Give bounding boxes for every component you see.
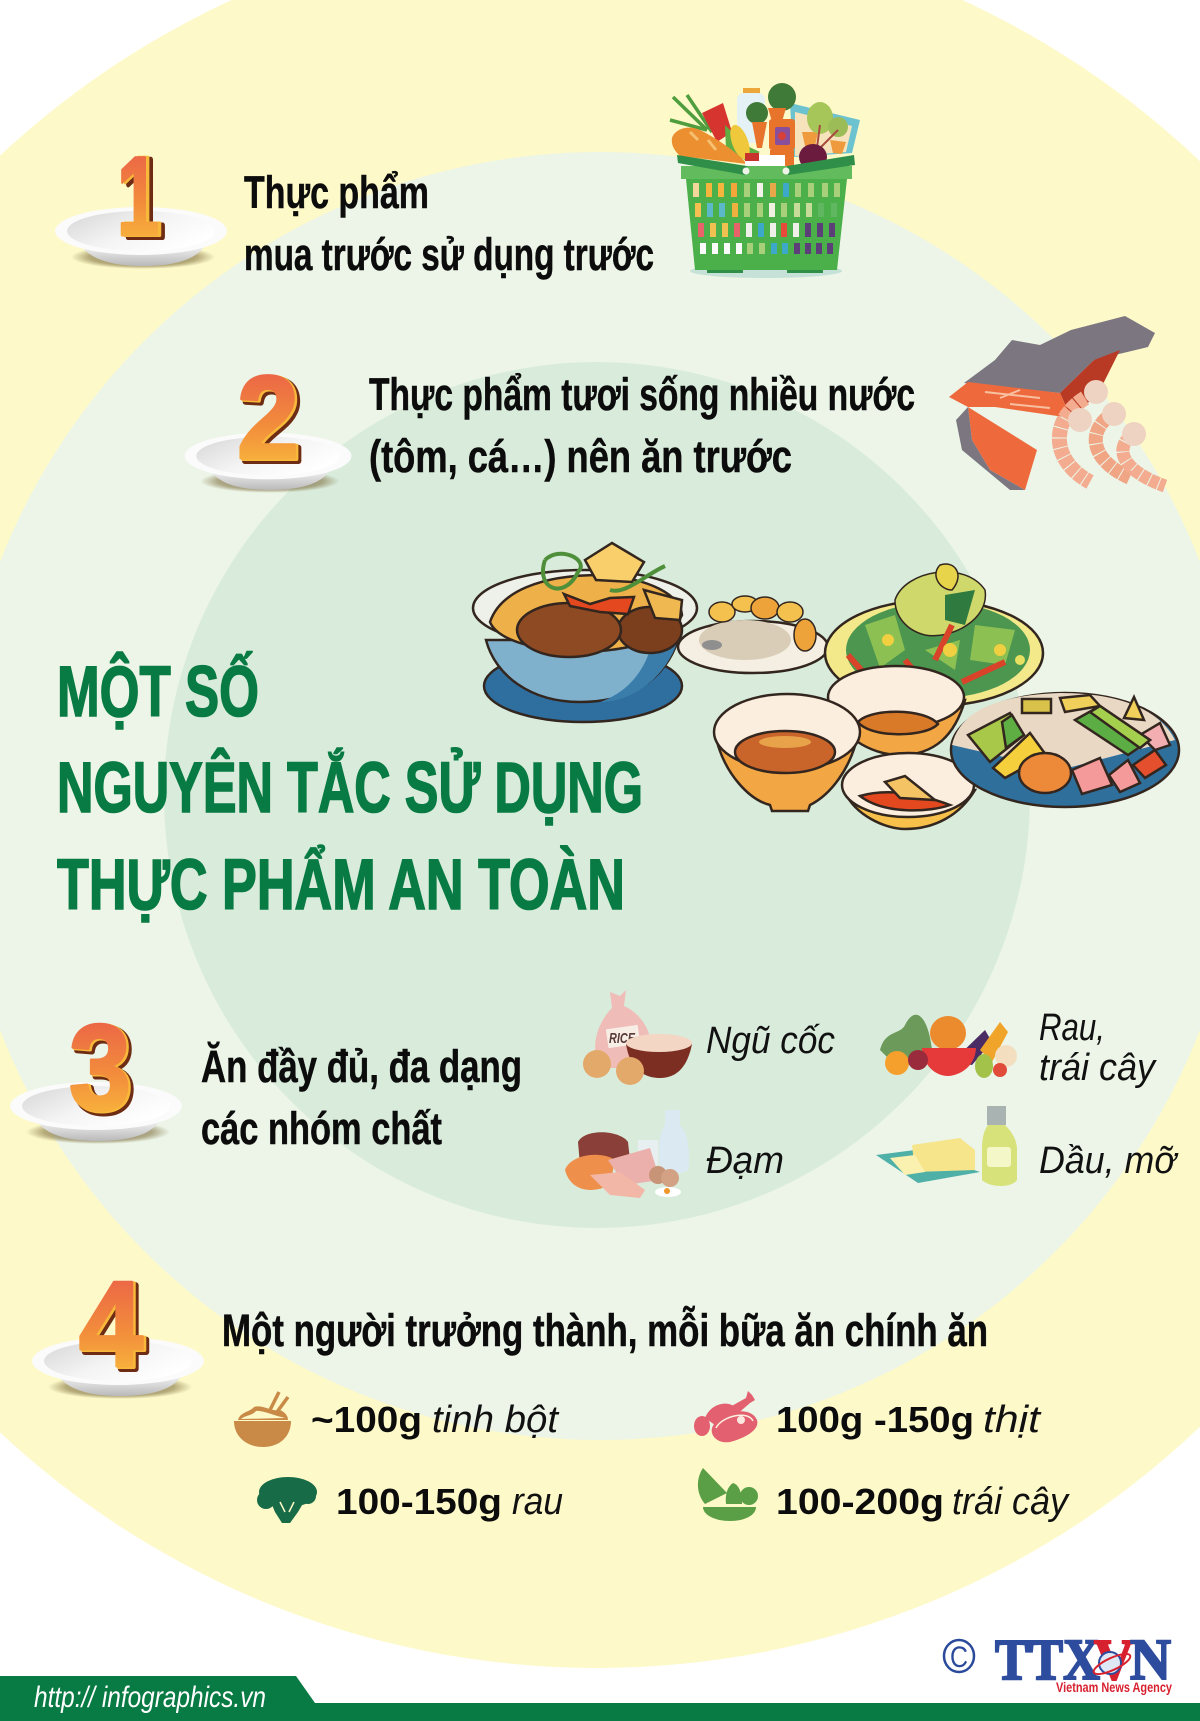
logo: TTXVN [995,1627,1172,1695]
background: pale green middle circle [0,152,1200,1440]
icon: rice bowl [234,1392,291,1447]
label: Rau, trái cây: Rau, [1039,1007,1105,1049]
step 4: numbered plate: 4 [81,1257,145,1393]
portion: tinh bột: ~100g [311,1399,422,1440]
portion: thịt: 100g -150g [776,1399,974,1440]
portion: tinh bột [311,1399,559,1441]
side plate with fried pieces [678,596,828,673]
step 1: text: Thực phẩm [244,167,429,218]
portion: thịt [776,1399,1042,1441]
big blue bowl with braised food [473,543,697,722]
back sauce bowl [828,666,965,755]
step 4: numbered plate: 4 [83,1259,147,1395]
step 4: numbered plate [32,1256,204,1399]
front sauce bowl [714,694,860,811]
step 3: numbered plate [10,999,182,1144]
step 2: numbered plate: 2 [241,355,303,487]
title: MỘT SỐ [57,652,259,732]
step 3: numbered plate: 3 [69,999,131,1135]
portion: trái cây: trái cây [952,1481,1070,1523]
salad plate [825,564,1043,706]
portion: rau: rau [512,1481,563,1523]
label: Dầu, mỡ: Dầu, mỡ [1039,1140,1179,1182]
small bowl with garnish [842,753,975,829]
illustration: meal dishes [473,543,1179,829]
step 1: numbered plate [55,134,227,269]
icon: meat [694,1391,757,1442]
portion: rau [336,1481,563,1523]
icon: vegetables and fruit [880,1015,1017,1078]
logo: TTXVN: N [1130,1627,1171,1692]
step 2: numbered plate: 2 [239,353,301,485]
step 4: numbered plate: 4 [79,1256,143,1392]
label: Đạm: Đạm [706,1140,784,1182]
background: green inner circle [164,362,1030,1228]
icon: grocery basket [670,83,860,278]
step 3: text [201,1041,522,1154]
logo: TTXVN: TTX [995,1627,1100,1692]
title [57,652,643,925]
title: THỰC PHẨM AN TOÀN [57,845,625,925]
step 2: text: Thực phẩm tươi sống nhiều nước [369,369,915,420]
icon: broccoli [257,1477,317,1523]
icon: rice sack and bowl [583,990,692,1085]
step 2: text: (tôm, cá…) nên ăn trước [369,431,792,482]
step 1: numbered plate: 1 [117,134,159,259]
copyright mark: C [950,1641,968,1674]
icon: rice sack and bowl: RICE [609,1030,636,1047]
icon: butter and oil [876,1106,1017,1186]
step 3: text: Ăn đầy đủ, đa dạng [201,1041,522,1092]
step 3: numbered plate: 3 [73,1002,135,1138]
icon: fruit bowl [698,1468,758,1521]
step 1: numbered plate: 1 [123,136,165,261]
label: Rau, trái cây [1039,1007,1157,1089]
footer bar [0,1676,1200,1721]
portion: rau: 100-150g [336,1481,502,1522]
portion: trái cây: 100-200g [776,1481,944,1522]
label: Rau, trái cây: trái cây [1039,1047,1157,1089]
icon: salmon and shrimp [949,316,1165,490]
step 3: numbered plate: 3 [71,1000,133,1136]
logo: TTXVN: V [1094,1627,1134,1692]
portion: thịt: thịt [983,1399,1042,1441]
step 2: numbered plate: 2 [237,352,299,484]
step 2: text [369,369,915,482]
step 3: text: các nhóm chất [201,1103,442,1154]
portion: trái cây [776,1481,1070,1523]
mixed platter [951,693,1179,807]
footer bar: http:// infographics.vn [34,1681,266,1714]
step 1: text: mua trước sử dụng trước [244,229,654,280]
step 4: text: Một người trưởng thành, mỗi bữa ăn chính ăn [222,1305,988,1356]
step 1: text [244,167,654,280]
step 2: numbered plate [185,352,351,493]
icon: meat, fish, eggs and milk [565,1110,689,1198]
label: Ngũ cốc: Ngũ cốc [706,1020,835,1062]
step 1: numbered plate: 1 [120,134,162,259]
title: NGUYÊN TẮC SỬ DỤNG [57,748,643,828]
portion: tinh bột: tinh bột [432,1399,559,1441]
